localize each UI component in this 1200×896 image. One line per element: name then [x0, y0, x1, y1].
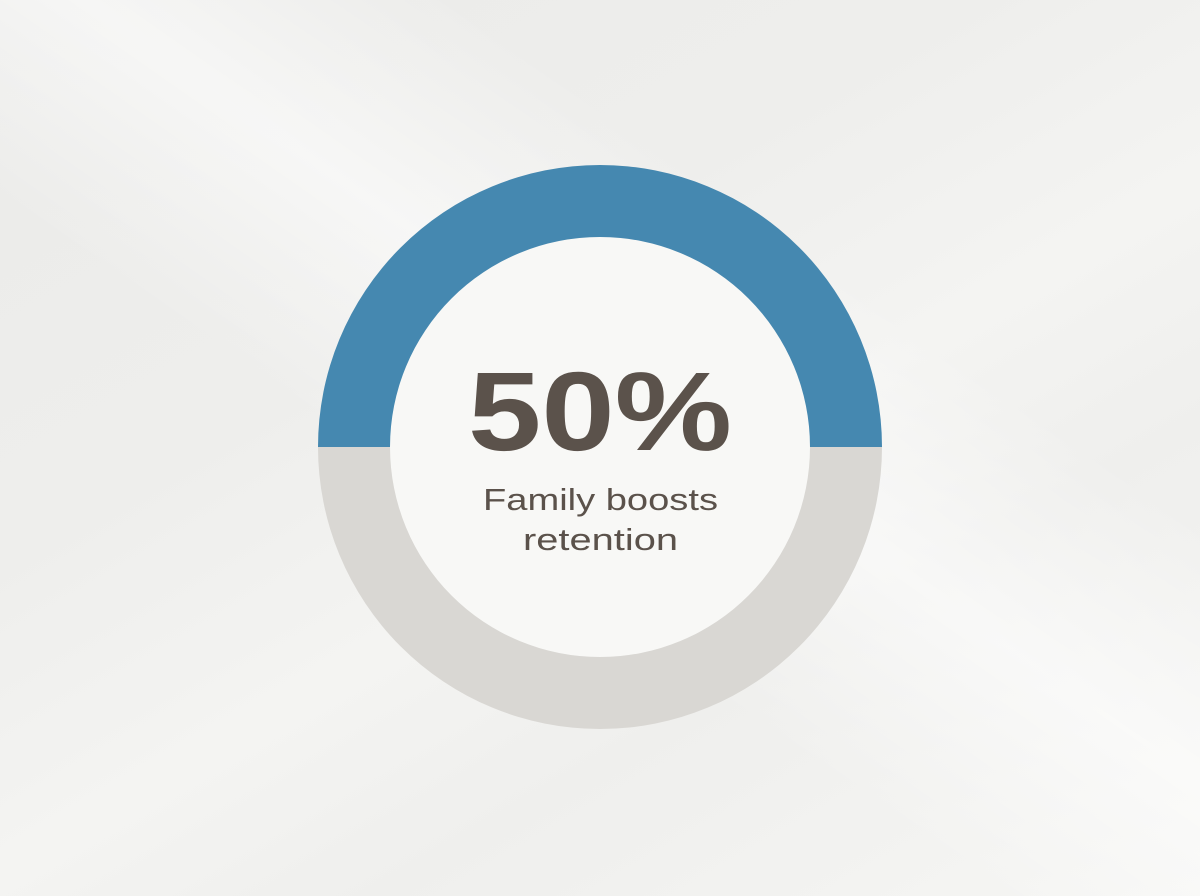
segment: blue top half: [318, 165, 882, 447]
caption: Family boosts: [483, 482, 718, 517]
segment: grey bottom half: [318, 447, 882, 729]
value label: 50%: [468, 349, 732, 474]
inner fill: [390, 237, 810, 657]
caption: retention: [523, 522, 678, 557]
caption: [483, 482, 718, 557]
